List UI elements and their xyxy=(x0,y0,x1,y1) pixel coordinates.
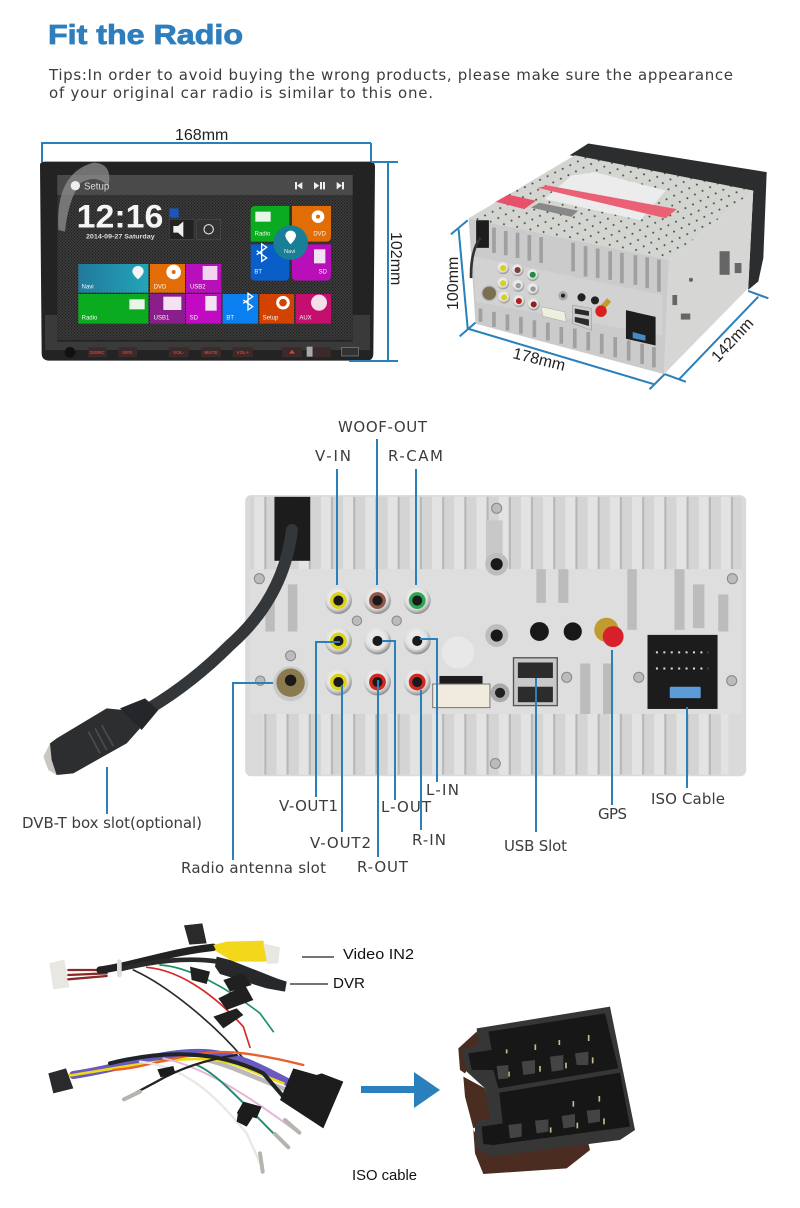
line: video in2 xyxy=(302,956,334,958)
label: dvb-t box slot: DVB-T box slot(optional) xyxy=(22,814,202,832)
tips text: Tips:In order to avoid buying the wrong products, please make sure the appearance xyxy=(48,66,733,84)
iso socket xyxy=(626,310,656,345)
white multi-pin connector xyxy=(433,676,509,708)
tile: dvd xyxy=(150,264,185,293)
white sticker xyxy=(544,172,666,220)
label: video in2: Video IN2 xyxy=(343,946,414,963)
metal pins xyxy=(124,1092,299,1172)
lower dark wires xyxy=(110,1054,283,1097)
black tag top xyxy=(184,923,207,945)
tile: dvd: DVD xyxy=(154,285,167,291)
tile: radio wide xyxy=(78,294,148,324)
arrow xyxy=(361,1072,440,1108)
dimension: 178mm: 178mm xyxy=(511,345,567,375)
red wire xyxy=(147,967,250,1047)
barcode xyxy=(531,203,578,217)
white wire xyxy=(140,1062,262,1167)
clock: 12:16 xyxy=(77,198,163,234)
dimension: 168mm xyxy=(42,127,371,162)
gps connector xyxy=(595,300,609,317)
lower yellow wire xyxy=(67,1059,283,1083)
cable boot xyxy=(274,497,310,561)
jack: v-out1 xyxy=(325,627,352,654)
hardware button row: MUTE xyxy=(204,350,218,355)
tips text xyxy=(48,66,733,102)
tile: dvd large: DVD xyxy=(313,231,327,237)
title: Fit the Radio xyxy=(48,19,243,50)
bluetooth badge xyxy=(169,208,179,218)
rca jacks xyxy=(497,262,540,310)
centre boss xyxy=(486,520,503,568)
callout lines xyxy=(107,439,687,860)
label: r-out: R-OUT xyxy=(357,858,409,876)
tile: sd large: SD xyxy=(319,270,328,276)
brown back shell xyxy=(458,1032,590,1174)
head unit body xyxy=(40,162,375,361)
setup gear icon xyxy=(71,181,80,190)
small pink label xyxy=(496,195,536,209)
round holes xyxy=(485,553,582,647)
grey latches xyxy=(497,1052,600,1138)
tile: radio wide: Radio xyxy=(82,315,98,321)
media controls xyxy=(295,182,344,189)
grip ribs xyxy=(88,725,113,753)
tile: sd large xyxy=(292,244,331,281)
green wire xyxy=(160,965,273,1032)
label: usb slot: USB Slot xyxy=(504,837,567,855)
tile: navi wide: Navi xyxy=(82,285,94,291)
label: iso cable: ISO Cable xyxy=(651,790,725,808)
side cut-outs xyxy=(672,251,741,320)
radio antenna socket xyxy=(273,666,308,701)
tile: aux xyxy=(296,294,331,324)
dvr lead xyxy=(120,960,218,969)
hardware button row: VOL+ xyxy=(237,350,249,355)
connector body xyxy=(462,1007,635,1157)
lower wire bundle xyxy=(73,1053,290,1083)
tile: usb1: USB1 xyxy=(154,315,170,321)
upper wire strands xyxy=(68,970,107,979)
yellow rca plug xyxy=(213,941,280,964)
jack: v-out2 xyxy=(325,669,352,695)
hardware button row: GPS xyxy=(122,350,132,355)
cable to dvb-t connector xyxy=(150,530,292,708)
bezel sides xyxy=(45,315,370,350)
label: gps: GPS xyxy=(598,805,627,823)
tile: bt large xyxy=(251,244,289,281)
lower silver wires xyxy=(207,1060,287,1090)
tile: usb2 xyxy=(186,264,221,293)
usb stack xyxy=(572,305,592,330)
upper white plug xyxy=(49,959,69,989)
tile: usb1 xyxy=(150,294,185,324)
jack: r-in xyxy=(404,669,431,695)
jack: l-out xyxy=(364,627,391,654)
white band xyxy=(112,962,126,975)
label: v-in: V-IN xyxy=(315,447,351,465)
upper wire bundle xyxy=(100,947,213,970)
dimension: 100mm: 100mm xyxy=(445,257,462,310)
jack: l-in xyxy=(404,627,431,654)
jack: r-cam xyxy=(404,587,431,614)
black front bezel xyxy=(570,143,767,290)
jack: r-out xyxy=(364,669,391,695)
dimension: 102mm: 102mm xyxy=(387,232,404,285)
setup caption: Setup xyxy=(84,181,109,192)
label: woof-out: WOOF-OUT xyxy=(338,418,428,436)
date: 2014-09-27 Saturday xyxy=(86,235,155,241)
tile: radio large xyxy=(251,206,289,242)
watermark xyxy=(58,163,109,232)
black dvr plug xyxy=(215,957,287,992)
gps antenna connector xyxy=(594,618,624,647)
side and centre slots xyxy=(265,569,728,714)
tile: sd: SD xyxy=(190,315,199,321)
antenna socket xyxy=(482,286,497,301)
brightness button xyxy=(197,219,221,239)
tile: sd xyxy=(186,294,221,324)
navi circle xyxy=(273,225,308,260)
tile: setup xyxy=(259,294,294,324)
middle plate xyxy=(250,569,742,714)
hardware button row xyxy=(65,347,358,358)
hardware button row: VOL- xyxy=(173,350,185,355)
teal wire xyxy=(197,1065,287,1147)
tile: dvd large xyxy=(292,206,331,242)
pink label xyxy=(538,186,677,218)
upper cavity xyxy=(468,1013,618,1088)
dimension: 142mm: 142mm xyxy=(708,315,757,366)
lower cavity xyxy=(482,1073,630,1145)
black plug left xyxy=(48,1068,73,1093)
blank plug xyxy=(442,636,474,669)
panel: iso connector close-up xyxy=(458,1007,635,1174)
black wire xyxy=(133,970,243,1058)
panel: connector back plate xyxy=(245,495,746,776)
iso plug black xyxy=(280,1068,343,1128)
panel: rear three-quarter view of radio xyxy=(451,143,768,389)
panel: front view of radio xyxy=(40,162,375,361)
dimension lines xyxy=(451,220,768,389)
bottom fins xyxy=(264,714,728,775)
label: iso cable caption: ISO cable xyxy=(352,1167,417,1184)
white connector xyxy=(541,307,566,322)
jack: v-in xyxy=(325,587,352,614)
pink wire xyxy=(163,1058,297,1132)
line: dvr xyxy=(290,983,328,985)
black lead xyxy=(123,1055,237,1099)
strain relief xyxy=(120,698,158,730)
label: r-cam: R-CAM xyxy=(388,447,443,465)
label: l-out: L-OUT xyxy=(381,798,432,816)
mid plate xyxy=(474,256,662,335)
label: radio antenna slot: Radio antenna slot xyxy=(181,859,326,877)
label: v-out1: V-OUT1 xyxy=(279,797,338,815)
side face xyxy=(664,191,753,374)
small tags xyxy=(157,1066,262,1127)
hardware button row: DISRC xyxy=(90,350,105,355)
tile: usb2: USB2 xyxy=(190,285,206,291)
top face xyxy=(469,155,753,260)
metal tip xyxy=(43,743,57,775)
tile: bt large: BT xyxy=(254,270,262,276)
tile: bt xyxy=(223,293,258,324)
dimension: 102mm xyxy=(349,162,404,361)
pins xyxy=(507,1035,604,1133)
round ports xyxy=(558,291,599,304)
top fins xyxy=(250,497,742,569)
connector body xyxy=(48,708,140,775)
usb ports xyxy=(514,658,557,706)
tile: aux: AUX xyxy=(299,315,312,321)
tile: navi wide xyxy=(78,264,148,293)
lower orange wire xyxy=(113,1052,303,1070)
tile: setup: Setup xyxy=(263,315,279,321)
volume button xyxy=(169,219,194,239)
tile: radio large: Radio xyxy=(255,231,271,237)
rear fins xyxy=(481,228,659,367)
screen top bar xyxy=(57,175,353,195)
label: dvr: DVR xyxy=(333,975,365,992)
navi circle: Navi xyxy=(284,249,295,255)
plate xyxy=(245,495,746,776)
iso socket xyxy=(648,635,718,709)
dvb-t connector xyxy=(43,698,158,775)
jack: woof-out xyxy=(364,587,391,614)
dimension: 168mm: 168mm xyxy=(175,127,228,144)
black flag labels xyxy=(190,967,253,1028)
tile: bt: BT xyxy=(226,315,234,321)
label: l-in: L-IN xyxy=(426,781,459,799)
screws xyxy=(254,503,737,769)
cable stub xyxy=(471,220,489,278)
label: r-in: R-IN xyxy=(412,831,446,849)
label: v-out2: V-OUT2 xyxy=(310,834,371,852)
tips text: of your original car radio is similar to this one. xyxy=(49,84,433,102)
screen xyxy=(57,175,353,340)
rear face xyxy=(469,218,669,374)
panel: wiring harness xyxy=(48,923,343,1172)
